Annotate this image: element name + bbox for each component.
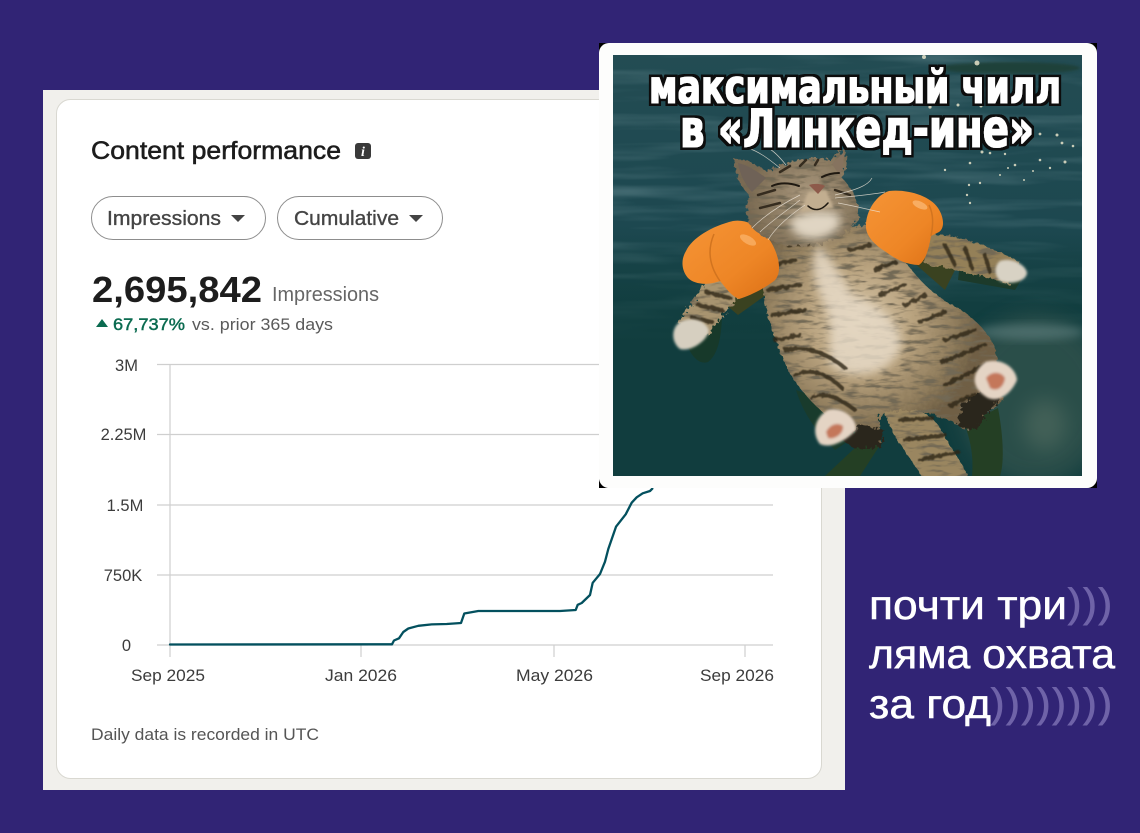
line 3: за год (869, 681, 991, 727)
dropdown: Cumulative: Cumulative (294, 207, 399, 230)
total impressions number: Impressions (272, 284, 379, 306)
x axis labels: Sep 2026 (700, 666, 774, 685)
water wing: left (682, 221, 779, 299)
icon: info (355, 143, 371, 160)
water wing: right (866, 191, 943, 265)
impressions line (170, 489, 652, 644)
y axis labels: 2.25M (101, 426, 146, 444)
line 1 brackets: ))) (1068, 582, 1112, 626)
sparkles on water (922, 55, 1074, 204)
meme caption (649, 60, 1061, 160)
body and hind legs (763, 218, 1003, 445)
tail (884, 408, 968, 476)
line chart (101, 357, 774, 685)
paw: left front (673, 319, 709, 350)
total impressions number: 2,695,842 (92, 269, 262, 310)
x axis labels: Jan 2026 (325, 666, 397, 685)
photo card: cat with water wings (599, 43, 1110, 488)
cat body (678, 218, 1020, 482)
growth indicator: 67,737% (113, 315, 185, 334)
whiskers (748, 148, 885, 240)
card: content performance (56, 100, 822, 778)
y axis labels: 750K (104, 567, 142, 585)
total impressions number (92, 269, 379, 310)
dropdown: Impressions: Impressions (107, 207, 221, 230)
muzzle and chin (790, 212, 840, 239)
growth indicator (96, 315, 333, 334)
paw: right front (996, 260, 1027, 283)
heading: Content performance: Content performance (91, 137, 341, 165)
hind leg dark undersides (842, 390, 1000, 449)
chest and belly light fur (813, 245, 901, 374)
x axis labels (131, 666, 774, 685)
line 3 brackets: )))))))) (991, 682, 1112, 726)
photo (613, 55, 1110, 485)
arm: left front (678, 274, 738, 335)
side caption (869, 582, 1115, 727)
water (613, 55, 1110, 485)
y axis labels (101, 357, 146, 655)
y axis labels: 1.5M (107, 497, 143, 515)
fur stripes (692, 243, 990, 460)
arm: right front (925, 234, 1020, 284)
closed eyes and forehead stripes (758, 160, 850, 210)
reflections under the cat (680, 245, 1026, 476)
icon: info: i (361, 145, 365, 160)
growth indicator: vs. prior 365 days (192, 315, 333, 334)
dropdown: Cumulative (278, 196, 442, 240)
y axis labels: 3M (115, 357, 138, 375)
paw: right hind (975, 361, 1017, 399)
cat head (734, 148, 885, 246)
nose (809, 184, 825, 194)
paw: left hind (815, 409, 856, 446)
line 1: почти три (869, 582, 1067, 628)
dropdown: Impressions (92, 196, 266, 240)
panel: LinkedIn analytics screenshot (43, 90, 845, 790)
footnote: Daily data is recorded in UTC (91, 725, 319, 744)
line 2: ляма охвата (869, 631, 1115, 677)
x axis labels: May 2026 (516, 666, 593, 685)
x axis labels: Sep 2025 (131, 666, 205, 685)
y axis labels: 0 (122, 637, 131, 655)
paws (673, 260, 1027, 446)
ear inner (738, 163, 766, 192)
